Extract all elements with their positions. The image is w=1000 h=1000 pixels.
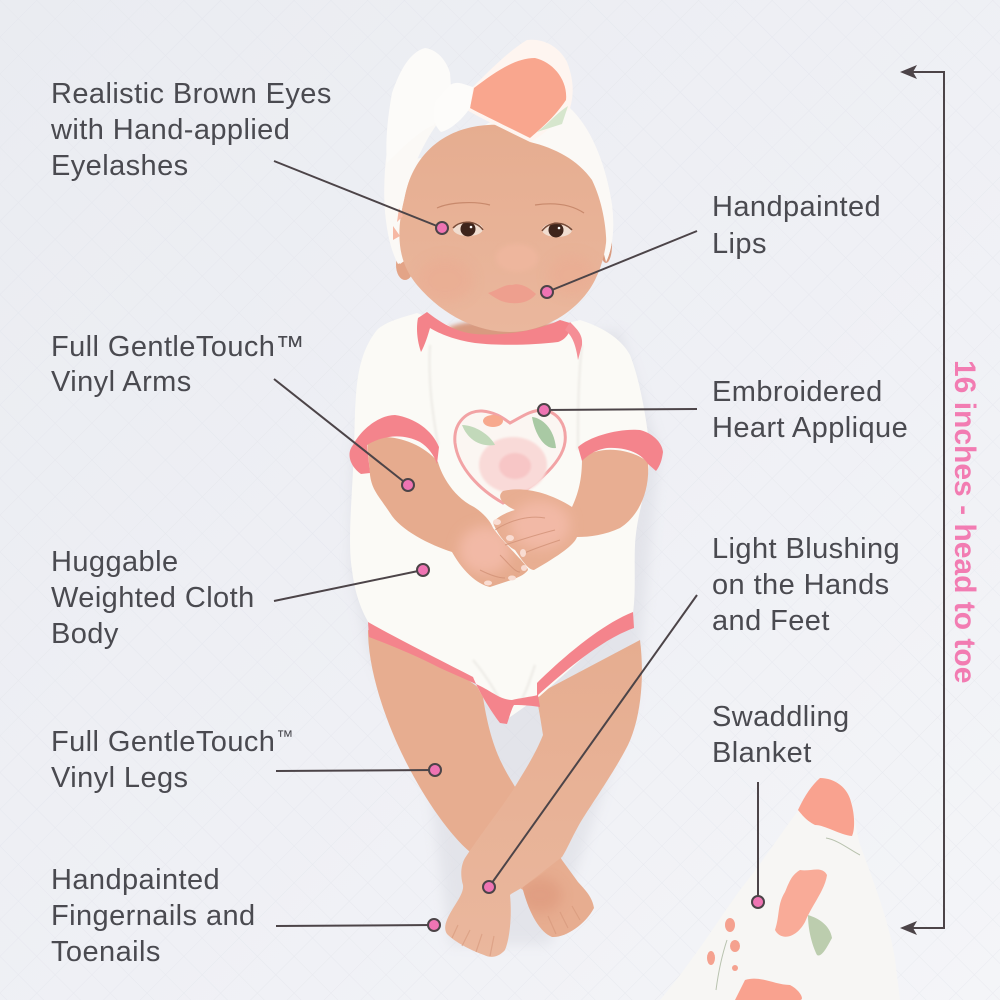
callout: blushing: and Feet bbox=[712, 605, 830, 637]
left leg band bbox=[368, 622, 540, 724]
right neck band bbox=[565, 322, 582, 360]
nose bbox=[496, 244, 538, 272]
callout: nails: Fingernails and bbox=[51, 900, 256, 932]
callout: body: Weighted Cloth bbox=[51, 582, 255, 614]
callout: blanket: Swaddling bbox=[712, 701, 850, 733]
callout: eyes: Eyelashes bbox=[51, 150, 189, 182]
headband right side bbox=[530, 110, 613, 262]
head bbox=[399, 125, 607, 332]
left cheek blush bbox=[417, 258, 473, 302]
callout: lips bbox=[541, 191, 881, 298]
eyebrows bbox=[437, 203, 584, 213]
bow: left loop bbox=[386, 48, 452, 163]
callout: lips: Lips bbox=[712, 228, 767, 260]
headband left side bbox=[384, 120, 440, 264]
callout: arms: Vinyl Arms bbox=[51, 366, 192, 398]
callout: arms bbox=[51, 331, 414, 491]
doll bbox=[349, 40, 663, 957]
callout: blanket: Blanket bbox=[712, 737, 812, 769]
neck band bbox=[417, 312, 570, 352]
callout: eyes bbox=[50, 78, 448, 234]
bow: green print bbox=[537, 106, 568, 132]
blanket flowers bbox=[798, 778, 854, 836]
callout: legs bbox=[51, 726, 441, 794]
callout: nails: Toenails bbox=[51, 936, 161, 968]
left eye bbox=[453, 222, 483, 236]
fingernails bbox=[484, 519, 527, 586]
callout: eyes: with Hand-applied bbox=[50, 114, 290, 146]
callout: blanket bbox=[712, 701, 850, 908]
right arm and hand bbox=[493, 450, 648, 570]
callout: blushing: Light Blushing bbox=[712, 533, 900, 565]
callout: body bbox=[51, 546, 429, 650]
left arm bbox=[367, 437, 528, 587]
callout: arms: Full GentleTouch™ bbox=[51, 331, 305, 363]
callout: body: Body bbox=[51, 618, 119, 650]
callout: legs: ™ bbox=[276, 727, 294, 746]
back leg bbox=[368, 630, 594, 937]
lips bbox=[488, 284, 536, 303]
doll shadow bbox=[350, 330, 660, 945]
callout: heart applique: Heart Applique bbox=[712, 412, 908, 444]
height bracket with arrows bbox=[900, 65, 944, 935]
callout: lips: Handpainted bbox=[712, 191, 881, 223]
right sleeve cuff bbox=[578, 430, 663, 471]
bow: right loop bbox=[467, 40, 573, 142]
callout: heart applique bbox=[538, 376, 908, 444]
right eye bbox=[542, 222, 572, 238]
bodysuit bbox=[350, 313, 650, 722]
left sleeve cuff bbox=[349, 415, 439, 474]
callout: blushing bbox=[483, 533, 900, 893]
right cheek blush bbox=[548, 255, 596, 295]
bow: coral print bbox=[470, 58, 566, 138]
back foot shading bbox=[523, 879, 560, 911]
right leg band bbox=[537, 612, 634, 696]
callout: heart applique: Embroidered bbox=[712, 376, 883, 408]
ear bbox=[396, 250, 414, 280]
heart applique bbox=[455, 410, 565, 503]
bodysuit folds bbox=[429, 345, 582, 710]
callout: legs: Vinyl Legs bbox=[51, 762, 188, 794]
left hand blush bbox=[459, 526, 511, 574]
height label: 16 inches - head to toe bbox=[948, 360, 981, 683]
callout: eyes: Realistic Brown Eyes bbox=[51, 78, 332, 110]
callout: nails bbox=[51, 864, 440, 968]
callout: nails: Handpainted bbox=[51, 864, 220, 896]
bow knot bbox=[434, 83, 473, 132]
headband coral print bbox=[393, 128, 600, 240]
right hand blush bbox=[510, 501, 570, 549]
front leg bbox=[445, 640, 642, 957]
swaddling blanket bbox=[660, 778, 900, 1000]
callout: legs: Full GentleTouch bbox=[51, 726, 275, 758]
right ear bbox=[600, 227, 612, 263]
callout: blushing: on the Hands bbox=[712, 569, 890, 601]
fingers bbox=[480, 517, 560, 578]
callout: body: Huggable bbox=[51, 546, 179, 578]
headband outer bbox=[384, 100, 613, 264]
neck and chin shadow bbox=[447, 320, 563, 340]
toes bbox=[452, 906, 580, 956]
